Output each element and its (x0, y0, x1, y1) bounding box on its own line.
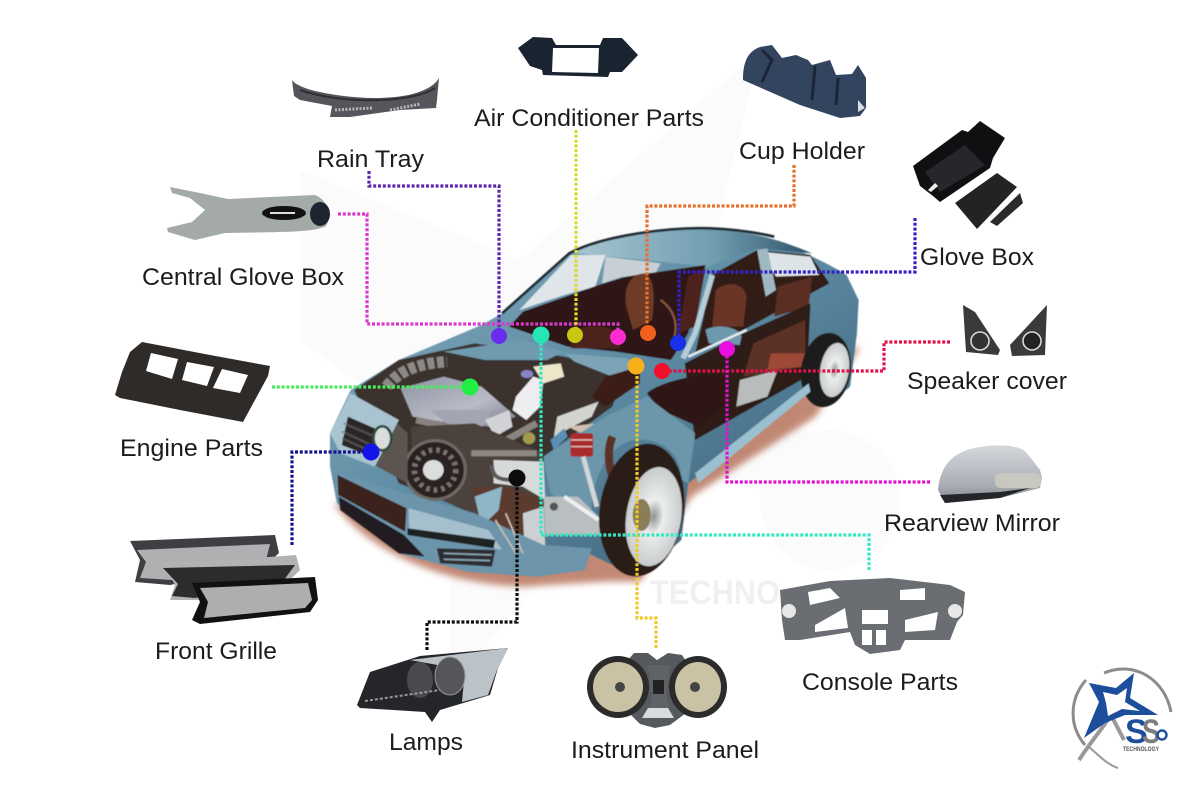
suspension strut (570, 433, 593, 457)
watermark: TECHNO (650, 574, 780, 612)
rear wheel (796, 330, 856, 410)
car illustration (330, 228, 860, 587)
label: air conditioner parts: Air Conditioner Parts (474, 105, 704, 132)
watermark (300, 50, 900, 690)
central engine mass (411, 423, 545, 517)
engine cover (401, 377, 516, 427)
line: console parts (541, 335, 869, 570)
radiator fan (405, 441, 465, 499)
icon: engine cover (115, 342, 270, 422)
line: cup holder (647, 165, 794, 333)
line: engine parts (272, 385, 470, 389)
logo: SS technology (1073, 669, 1171, 768)
label: central glove box: Central Glove Box (142, 264, 344, 291)
car body (330, 228, 859, 582)
car shadow (333, 347, 860, 587)
icon: instrument cluster (587, 653, 727, 728)
rear door opening (685, 303, 810, 440)
label: rain tray: Rain Tray (317, 146, 424, 173)
rear side windows (695, 250, 829, 353)
icon: speaker covers (963, 305, 1047, 356)
suspension parts (544, 497, 606, 535)
label: cup holder: Cup Holder (739, 138, 865, 165)
line: air conditioner parts (574, 130, 578, 335)
line: instrument panel (637, 366, 656, 648)
marker dots (362, 325, 735, 486)
connector lines (272, 130, 950, 650)
roof (571, 228, 812, 267)
icon: console dashboard (780, 578, 965, 654)
engine bay (354, 343, 626, 513)
icon: rearview mirror (938, 445, 1042, 503)
label: speaker cover: Speaker cover (907, 368, 1067, 395)
bumper (335, 470, 592, 577)
icon: central glove box (167, 187, 330, 240)
label: rearview mirror: Rearview Mirror (884, 510, 1060, 537)
mesh panel (371, 423, 407, 483)
icon: headlamp (357, 648, 508, 722)
icon: air conditioner part (518, 37, 638, 77)
logo: SS technology: TECHNOLOGY (1123, 746, 1160, 753)
windshield (519, 255, 606, 310)
line: rearview mirror (727, 349, 930, 482)
label: engine parts: Engine Parts (120, 435, 263, 462)
icon: glove box (913, 121, 1023, 229)
line: central glove box (338, 214, 618, 337)
label: instrument panel: Instrument Panel (571, 737, 759, 764)
headlight area and grille (330, 393, 399, 467)
logo: SS technology: S (1125, 713, 1148, 751)
white housing (494, 460, 545, 500)
label: lamps: Lamps (389, 729, 463, 756)
sill (695, 383, 810, 483)
line: speaker cover (662, 342, 950, 371)
front wheel (590, 438, 693, 582)
front fender (544, 397, 695, 520)
line: rain tray (369, 171, 499, 336)
line: lamps (427, 478, 517, 650)
label: console parts: Console Parts (802, 669, 958, 696)
line: glove box (679, 218, 915, 343)
label: front grille: Front Grille (155, 638, 277, 665)
label: glove box: Glove Box (920, 244, 1034, 271)
icon: rain tray (292, 78, 439, 117)
line: front grille (292, 452, 371, 545)
cabin interior (509, 265, 705, 360)
brown coil (475, 487, 540, 553)
icon: front grille (130, 535, 318, 624)
logo: SS technology: S (1142, 713, 1160, 751)
icon: cup holder (743, 45, 866, 118)
